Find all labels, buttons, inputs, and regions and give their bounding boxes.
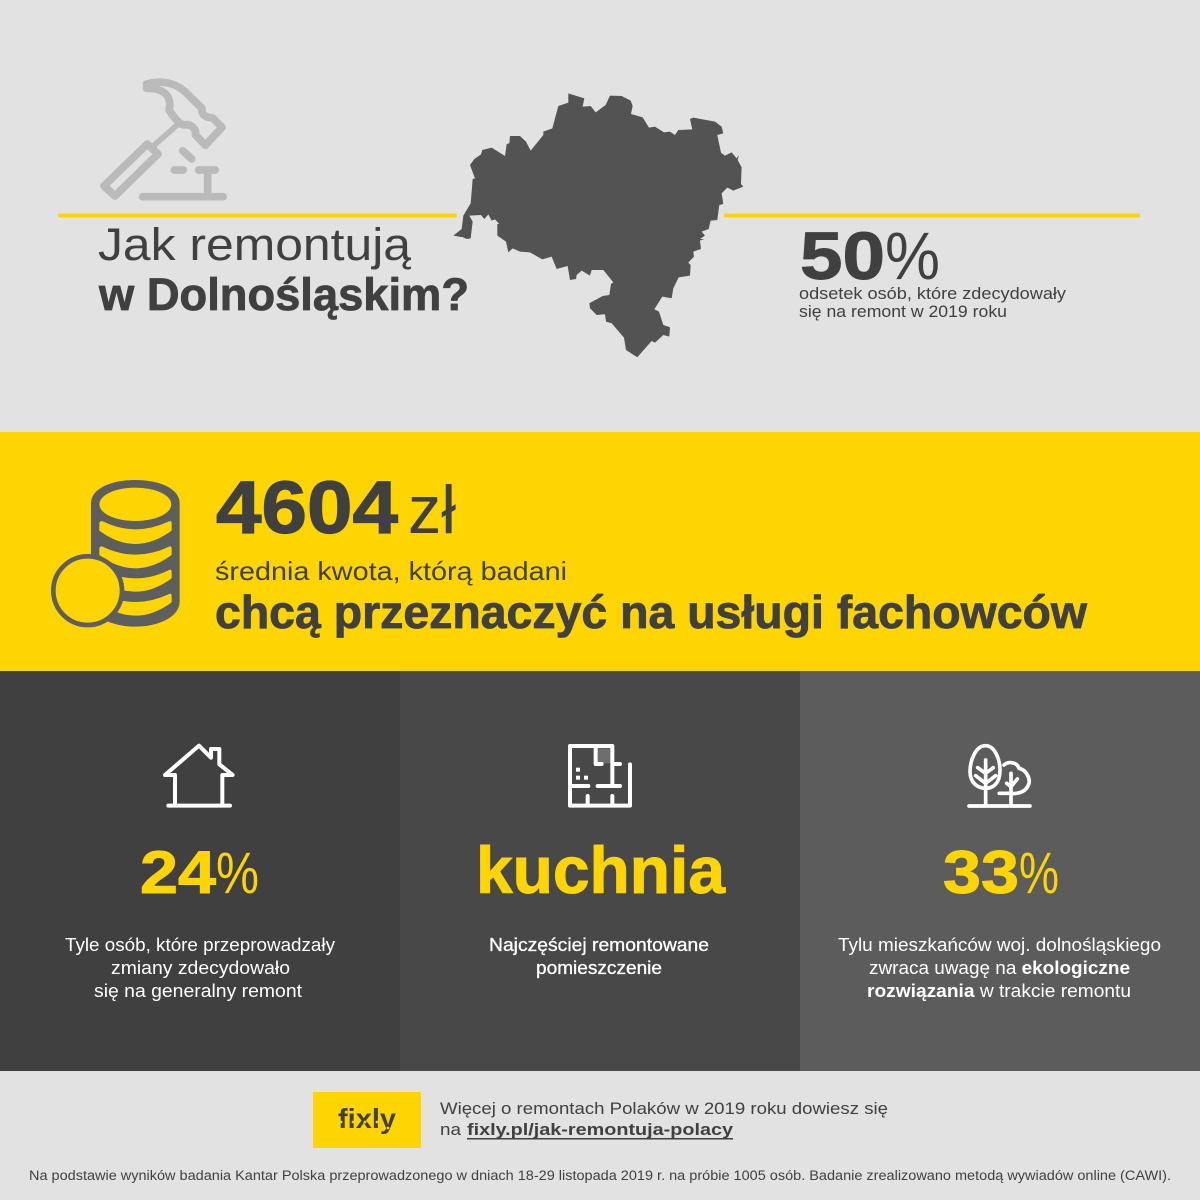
stat: 33%: %	[1019, 841, 1059, 906]
call to action: fixly.pl/jak-remontuja-polacy	[467, 1120, 734, 1139]
stat: 50%: odsetek osób, które zdecydowały	[799, 284, 1067, 303]
stat: 50%: %	[885, 219, 940, 294]
logo: fixly: fixly	[338, 1103, 396, 1134]
stat: 50%	[799, 219, 1067, 321]
call to action: Więcej o remontach Polaków w 2019 roku dowiesz się	[440, 1099, 888, 1118]
title: w Dolnośląskim?	[98, 269, 469, 320]
description: rozwiązania w trakcie remontu	[867, 981, 1131, 1001]
icon: floor plan	[570, 746, 630, 806]
amount description: chcą przeznaczyć na usługi fachowców	[215, 586, 1087, 638]
yellow divider right	[724, 214, 1140, 218]
description: pomieszczenie	[536, 958, 662, 978]
description	[65, 935, 335, 1001]
amount description	[215, 556, 1087, 638]
description: się na generalny remont	[94, 981, 302, 1001]
description: zmiany zdecydowało	[111, 958, 290, 978]
stat: 4604 zł: zł	[408, 472, 456, 548]
stat: 24%	[140, 839, 259, 906]
map: Lower Silesia region	[453, 93, 743, 357]
panel: yellow amount band	[0, 432, 1200, 671]
description: zwraca uwagę na ekologiczne	[869, 958, 1130, 978]
icon: house	[165, 746, 233, 806]
description	[838, 935, 1161, 1001]
title	[98, 219, 469, 320]
stat: 50%: 50	[800, 219, 885, 294]
footer background	[0, 1071, 1200, 1200]
panel: general renovation	[0, 671, 400, 1071]
description: Najczęściej remontowane	[489, 935, 709, 955]
panel: ecology	[800, 671, 1200, 1071]
stat: 50%: się na remont w 2019 roku	[799, 302, 1007, 321]
icon: hammer and nail	[104, 82, 223, 197]
title: Jak remontują	[98, 219, 412, 270]
logo: fixly	[313, 1092, 421, 1148]
panel: kitchen	[400, 671, 800, 1071]
source note: Na podstawie wyników badania Kantar Polska przeprowadzonego w dniach 18-29 listopada 2019 r. na próbie 1005 osób. Badanie zrealizowano metodą wywiadów online (CAWI).	[29, 1168, 1171, 1183]
header background	[0, 0, 1200, 432]
stat: 33%: 33	[943, 839, 1019, 906]
call to action	[440, 1099, 888, 1140]
stat: 4604 zł	[216, 466, 456, 549]
stat: 24%: 24	[140, 839, 217, 906]
description	[489, 935, 709, 978]
description: Tyle osób, które przeprowadzały	[65, 935, 335, 955]
amount description: średnia kwota, którą badani	[215, 556, 567, 586]
yellow divider left	[58, 214, 457, 218]
heading: kuchnia: kuchnia	[476, 833, 726, 907]
icon: trees	[969, 746, 1030, 806]
description: Tylu mieszkańców woj. dolnośląskiego	[838, 935, 1161, 955]
icon: coins	[53, 480, 180, 627]
stat: 33%	[943, 839, 1059, 906]
stat: 4604 zł: 4604	[216, 466, 398, 549]
stat: 24%: %	[216, 841, 259, 906]
call to action: na	[440, 1120, 462, 1139]
